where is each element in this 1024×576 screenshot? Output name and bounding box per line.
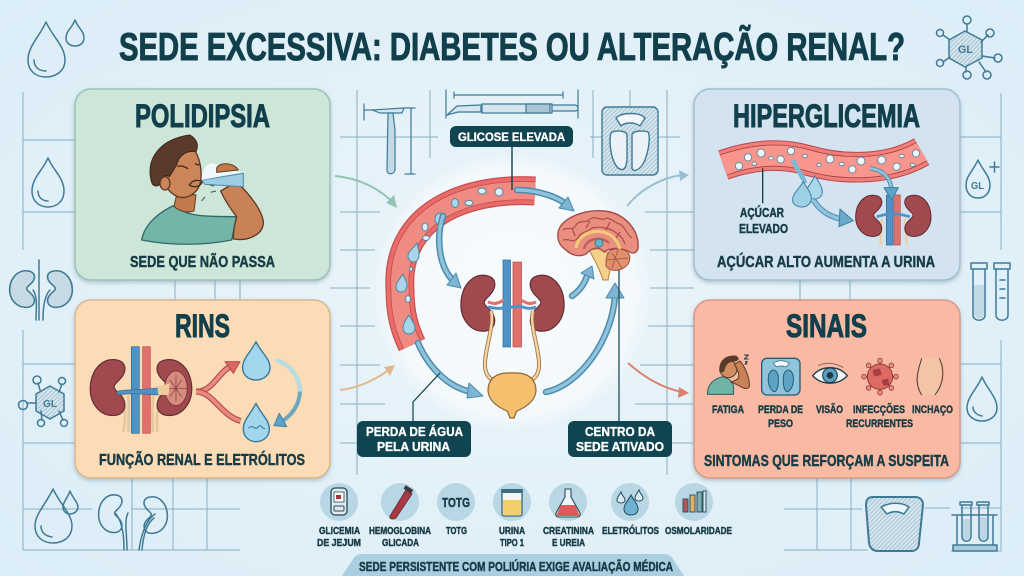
icon: reflex hammer [364, 104, 415, 174]
callout: perda de água: PELA URINA [377, 440, 450, 454]
caption: SEDE QUE NÃO PASSA [130, 251, 275, 271]
diagram: blood vessel with glucose [396, 188, 535, 345]
icon: top right molecule: GL [958, 44, 973, 56]
arrow: centre to sinais [628, 363, 682, 392]
blueprint grid [23, 90, 1001, 551]
exam: totg: TOTG [442, 495, 470, 510]
callout: glicose elevada: GLICOSE ELEVADA [458, 130, 565, 144]
icon: bottom right scale [866, 497, 923, 551]
exam: glicemia de jejum [317, 483, 361, 549]
central circle [375, 155, 649, 429]
symptom labels: VISÃO [816, 403, 843, 416]
illustration: vessel to kidneys [723, 147, 931, 245]
heading: hiperglicemia: HIPERGLICEMIA [733, 98, 920, 134]
icon: measuring instrument [446, 90, 578, 118]
footer banner [342, 554, 684, 576]
icon: GL molecule left [18, 376, 68, 426]
icon: right test tubes [971, 263, 1010, 320]
illustration: kidneys with water [90, 342, 300, 442]
glucose droplets [396, 188, 503, 334]
exam: creatinina e ureia [543, 483, 594, 549]
exam: osmolaridade: OSMOLARIDADE [665, 526, 732, 537]
caption: FUNÇÃO RENAL E ELETRÓLITOS [99, 451, 305, 469]
exam: glicemia de jejum: DE JEJUM [317, 538, 361, 549]
icon: GL drop plus [966, 160, 999, 198]
diagram: kidneys and vessels [461, 260, 564, 418]
icon: left drop [32, 158, 64, 207]
icon: man drinking water [142, 135, 263, 244]
icon: virus [862, 358, 898, 395]
icon: left kidneys [10, 260, 72, 320]
symptom labels: INFECÇÕES [853, 403, 905, 416]
arrowhead: blue [679, 170, 689, 181]
arrow: vessel to kidney [439, 216, 461, 288]
callout: glicose elevada [450, 126, 573, 190]
exams row [317, 483, 732, 549]
exam: hemoglobina glicada: GLICADA [382, 538, 419, 549]
heading: sinais: SINAIS [786, 308, 867, 344]
exam: osmolaridade [665, 483, 732, 537]
panel: polidipsia [75, 89, 330, 280]
arrowhead: red [678, 387, 689, 398]
exam: creatinina e ureia: CREATININA [543, 526, 594, 537]
arrow: vessel to bladder [418, 343, 483, 398]
icon: right drop [967, 377, 997, 421]
symptom labels: RECURRENTES [846, 418, 913, 430]
exam: eletrólitos [602, 483, 659, 537]
arrow: kidney to brain [572, 266, 594, 296]
arrow: rins to centre [340, 369, 390, 390]
symptom labels: FATIGA [712, 404, 744, 416]
icons: symptoms [707, 355, 943, 395]
label: açúcar elevado: ELEVADO [739, 222, 788, 236]
callout: perda de água: PERDA DE ÁGUA [366, 424, 463, 439]
exam: hemoglobina glicada [369, 483, 431, 549]
icon: swelling [917, 358, 943, 395]
heading: polidipsia: POLIDIPSIA [135, 98, 270, 134]
ureters [485, 311, 539, 380]
symptom labels: PESO [768, 418, 793, 430]
bladder [488, 373, 536, 418]
icon: bottom left kidneys [99, 495, 167, 550]
callout: perda de água [357, 373, 471, 457]
water arrows [196, 364, 233, 392]
exam: totg: TOTG [446, 526, 467, 537]
footer banner: SEDE PERSISTENTE COM POLIÚRIA EXIGE AVALIAÇÃO MÉDICA [359, 559, 673, 574]
symptom labels [712, 403, 953, 430]
exam: urina tipo 1: URINA [499, 526, 525, 537]
exam: hemoglobina glicada: HEMOGLOBINA [369, 526, 431, 537]
panel: rins [75, 300, 330, 478]
callout: centro da sede: CENTRO DA [585, 425, 655, 439]
exam: urina tipo 1 [493, 483, 531, 549]
icon: fatigue [707, 355, 749, 394]
icon: GL molecule left: GL [43, 399, 57, 410]
icon: top right molecule [936, 16, 1002, 79]
icon: blueprint scale [602, 107, 658, 175]
symptom labels: PERDA DE [758, 404, 803, 416]
callout: centro da sede: SEDE ATIVADO [576, 440, 664, 454]
caption: AÇÚCAR ALTO AUMENTA A URINA [717, 252, 935, 271]
icon: bottom right tube rack [952, 502, 997, 551]
icon: GL drop plus: GL [971, 181, 984, 192]
arrow: polidipsia to centre [335, 176, 395, 205]
panel: sinais [694, 300, 960, 478]
icon: eye [813, 363, 847, 383]
label: açúcar elevado [739, 205, 788, 236]
icon: top left drops [28, 20, 84, 77]
symptom labels: INCHAÇO [912, 404, 953, 416]
callout: centro da sede [568, 270, 672, 457]
icon: scale [762, 358, 800, 395]
exam: eletrólitos: ELETRÓLITOS [602, 524, 659, 537]
arrowhead: orange [384, 365, 395, 376]
arrow: centre to hiperglicemia [627, 175, 682, 206]
arrow: bladder to brain [546, 283, 624, 392]
diagram: brain [558, 211, 638, 280]
exam: totg [437, 483, 475, 537]
heading: rins: RINS [175, 308, 230, 344]
caption: SINTOMAS QUE REFORÇAM A SUSPEITA [704, 453, 949, 470]
arrow: glucose to brain [517, 190, 574, 211]
panel: hiperglicemia [694, 89, 960, 280]
label: açúcar elevado: AÇÚCAR [740, 205, 784, 220]
exam: glicemia de jejum: GLICEMIA [319, 526, 360, 537]
icon: bottom left drops [35, 489, 78, 543]
exam: urina tipo 1: TIPO 1 [500, 538, 524, 549]
arrowhead: green [386, 195, 397, 208]
exam: creatinina e ureia: E UREIA [552, 538, 585, 549]
